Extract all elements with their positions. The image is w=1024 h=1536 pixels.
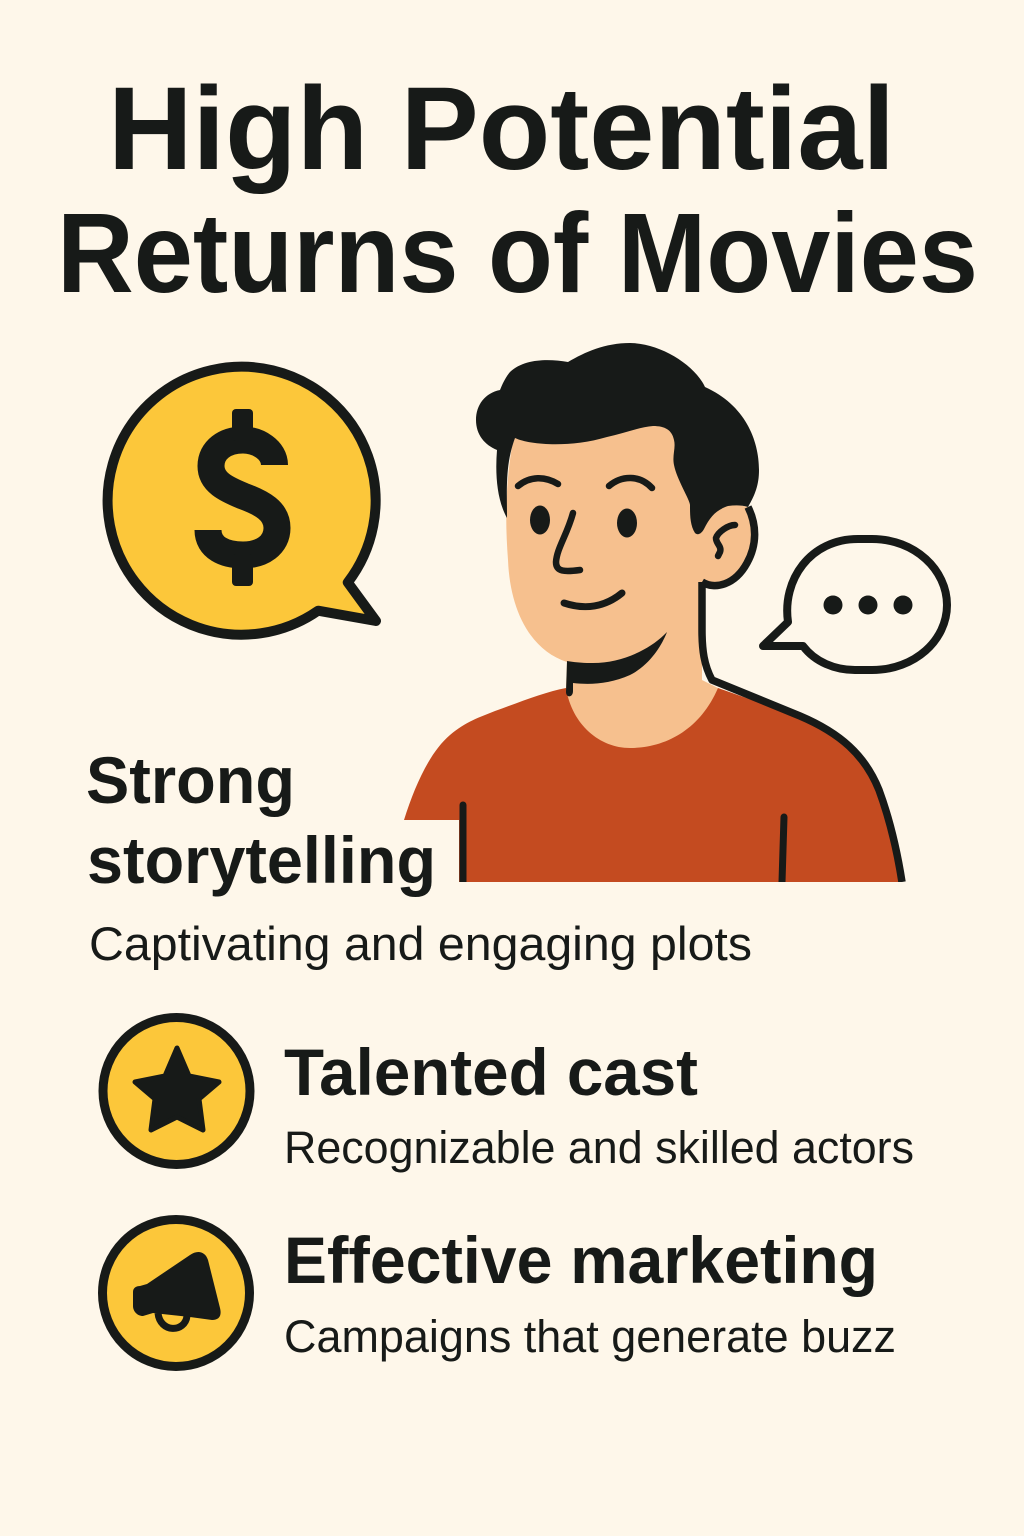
illustration: man (404, 343, 910, 888)
ear (695, 505, 755, 586)
mouth (564, 593, 622, 607)
title: Returns of Movies (57, 190, 978, 316)
icon: ellipsis speech bubble (763, 539, 947, 670)
heading: talented cast: Talented cast (284, 1035, 698, 1109)
mask below shirt (455, 882, 910, 888)
face and neck (506, 425, 718, 748)
chin shadow (566, 632, 667, 696)
ear detail (716, 525, 735, 556)
shirt (404, 688, 900, 882)
eyes (530, 506, 637, 538)
ear outline (702, 507, 755, 586)
icon: star (103, 1018, 250, 1164)
title: High Potential (108, 63, 895, 195)
heading: strong storytelling: storytelling (87, 823, 436, 897)
icon: megaphone (102, 1220, 250, 1366)
hair (476, 343, 759, 534)
heading: effective marketing: Effective marketing (284, 1223, 878, 1297)
nose (556, 513, 580, 571)
sleeve lines (463, 805, 784, 882)
text: talented cast description: Recognizable and skilled actors (284, 1122, 914, 1173)
text: storytelling description: Captivating and engaging plots (89, 917, 752, 970)
neck and shoulder outline (702, 582, 902, 882)
title (57, 63, 978, 316)
heading: strong storytelling (86, 743, 436, 897)
eyebrows (518, 478, 652, 488)
text: effective marketing description: Campaigns that generate buzz (284, 1311, 896, 1362)
heading: strong storytelling: Strong (86, 743, 295, 817)
icon: dollar speech bubble (108, 367, 376, 635)
